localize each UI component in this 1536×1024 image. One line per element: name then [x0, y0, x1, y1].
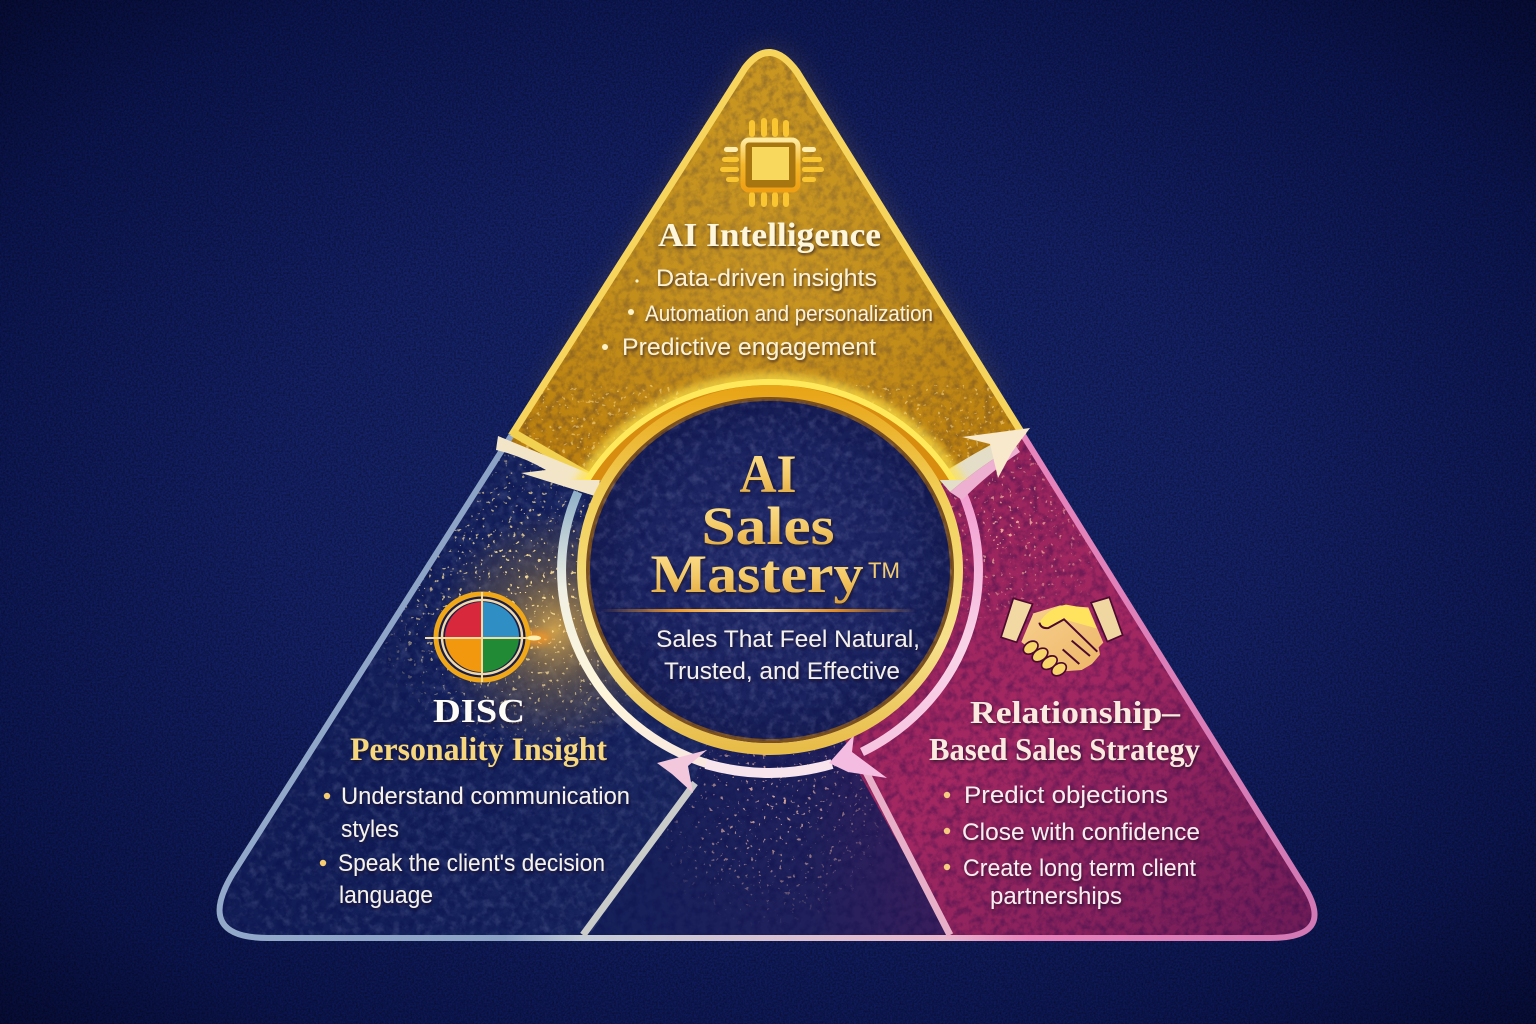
- icon: handshake: [1001, 597, 1123, 679]
- center title: Mastery: [650, 544, 864, 604]
- heading: Relationship-Based Sales Strategy: Based Sales Strategy: [929, 731, 1200, 767]
- bullets: DISC: Speak the client's decision: [338, 850, 605, 877]
- bullets: AI Intelligence: Automation and personalization: [645, 301, 933, 326]
- bullets: AI Intelligence: Predictive engagement: [622, 334, 876, 361]
- bullets: AI Intelligence: [602, 265, 933, 361]
- arrow: right to bottom: [829, 735, 887, 778]
- heading: DISC: DISC: [433, 693, 525, 730]
- bullets: DISC: language: [339, 882, 433, 909]
- center tagline: Sales That Feel Natural,: [656, 626, 920, 653]
- DISC content: [320, 592, 630, 909]
- arrow: top right toward relationship: [938, 428, 1030, 500]
- bullets: Relationship: partnerships: [990, 883, 1122, 910]
- bullets: Relationship: [944, 782, 1200, 910]
- center title: [650, 444, 864, 604]
- heading: AI Intelligence: AI Intelligence: [658, 217, 881, 254]
- bullets: Relationship: Predict objections: [964, 782, 1168, 809]
- panel: Relationship-Based Sales Strategy: [845, 438, 1312, 935]
- gold lower edges: [512, 432, 592, 478]
- divider: bottom right: [866, 772, 950, 935]
- bullets: DISC: styles: [341, 816, 399, 843]
- arrow: bottom to left: [657, 750, 707, 793]
- icon: DISC wheel: [425, 592, 551, 682]
- panel: AI Intelligence: [511, 56, 1016, 484]
- panel: bottom starfield: [591, 740, 946, 935]
- title divider: [600, 609, 916, 612]
- arc: right return: [862, 492, 978, 752]
- heading: Relationship-Based Sales Strategy: Relationship–: [970, 694, 1181, 730]
- center title: Sales: [702, 496, 834, 556]
- bullets: Relationship: Create long term client: [963, 855, 1196, 882]
- arc: bottom: [706, 764, 832, 773]
- triangle outer glow: [540, 52, 1000, 400]
- arrow: top left into center: [496, 436, 600, 497]
- bullets: Relationship: Close with confidence: [962, 819, 1200, 846]
- center title: AI: [740, 444, 796, 504]
- arc: left return: [562, 492, 708, 764]
- ring arcs and arrows: [496, 428, 1030, 793]
- trademark: TM: [868, 558, 900, 583]
- heading: Relationship-Based Sales Strategy: [929, 694, 1200, 767]
- framework triangle: [216, 49, 1318, 941]
- center circle: [583, 391, 957, 749]
- triangle outline: [220, 52, 1315, 938]
- top gold arc: [570, 368, 970, 480]
- center tagline: Trusted, and Effective: [664, 658, 900, 685]
- bullets: DISC: [320, 783, 630, 909]
- heading: Personality Insight: Personality Insight: [350, 732, 607, 768]
- AI Intelligence content: [602, 118, 933, 361]
- bullets: AI Intelligence: Data-driven insights: [656, 265, 877, 292]
- divider: bottom left: [583, 783, 695, 935]
- panel: DISC Personality Insight: [222, 452, 706, 935]
- bullets: DISC: Understand communication: [341, 783, 630, 810]
- Relationship content: [929, 597, 1200, 910]
- icon: microchip: [720, 118, 824, 207]
- center tagline: [656, 626, 920, 685]
